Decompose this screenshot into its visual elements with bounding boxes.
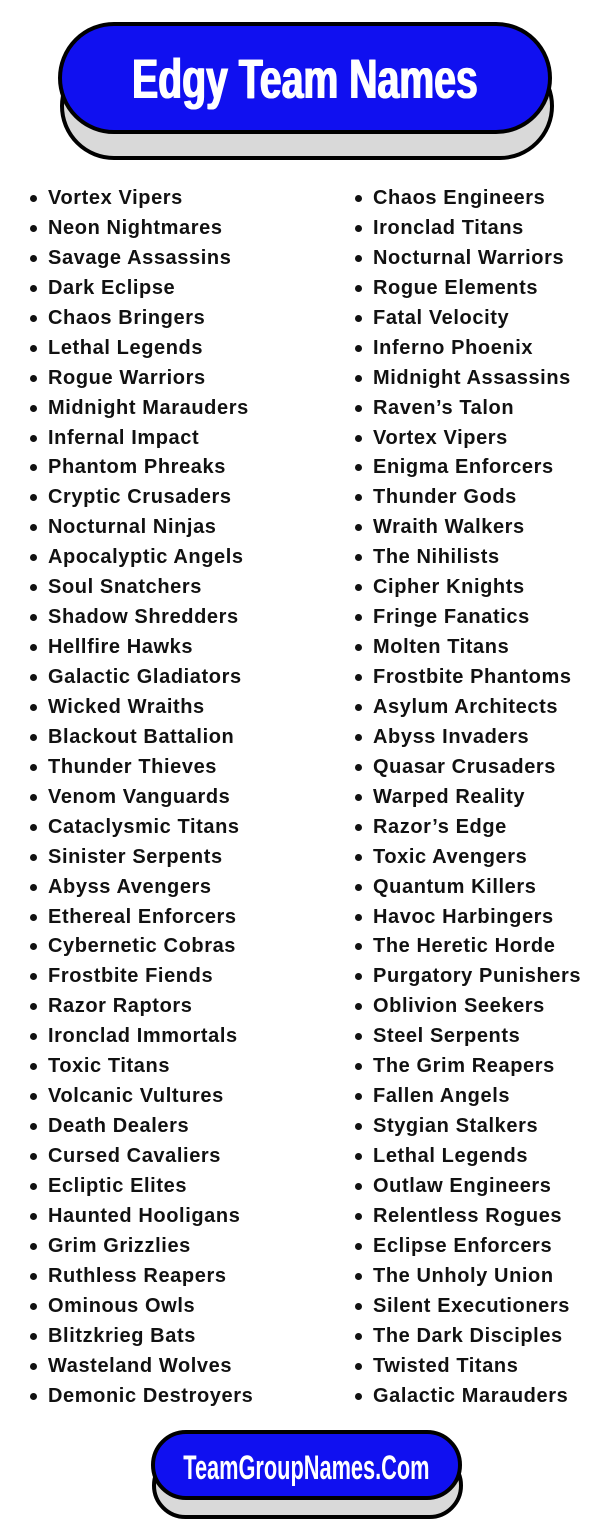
- left column list: Ominous Owls: [48, 1295, 195, 1317]
- right column list: Frostbite Phantoms: [373, 666, 572, 688]
- left column list: Cursed Cavaliers: [48, 1145, 221, 1167]
- left column list: Frostbite Fiends: [48, 965, 213, 987]
- right column list: Quantum Killers: [373, 876, 536, 898]
- right column list: Steel Serpents: [373, 1025, 520, 1047]
- left column list: Grim Grizzlies: [48, 1235, 191, 1257]
- left column list: Lethal Legends: [48, 337, 203, 359]
- right column list: Chaos Engineers: [373, 187, 545, 209]
- right column list: Enigma Enforcers: [373, 456, 554, 478]
- right column list: Stygian Stalkers: [373, 1115, 538, 1137]
- left column list: Demonic Destroyers: [48, 1384, 253, 1406]
- left column list: Wicked Wraiths: [48, 696, 205, 718]
- right column list: Wraith Walkers: [373, 516, 525, 538]
- footer text: [151, 1430, 462, 1500]
- left column list: Shadow Shredders: [48, 606, 239, 628]
- left column list: Thunder Thieves: [48, 756, 217, 778]
- left column list: Phantom Phreaks: [48, 456, 226, 478]
- right column list: Fatal Velocity: [373, 307, 509, 329]
- left column list: Venom Vanguards: [48, 786, 230, 808]
- right column list: Eclipse Enforcers: [373, 1235, 552, 1257]
- right column list: Galactic Marauders: [373, 1384, 568, 1406]
- left column list: Chaos Bringers: [48, 307, 205, 329]
- title banner: [58, 22, 554, 160]
- right column list: The Unholy Union: [373, 1265, 554, 1287]
- left column list: Cybernetic Cobras: [48, 935, 236, 957]
- right column list: Fringe Fanatics: [373, 606, 530, 628]
- right column list: Inferno Phoenix: [373, 337, 533, 359]
- right column list: Raven’s Talon: [373, 397, 514, 419]
- right column list: Relentless Rogues: [373, 1205, 562, 1227]
- right column list: Silent Executioners: [373, 1295, 570, 1317]
- left column list: Sinister Serpents: [48, 846, 223, 868]
- right column list: Molten Titans: [373, 636, 509, 658]
- left column list: Ecliptic Elites: [48, 1175, 187, 1197]
- left column list: Ethereal Enforcers: [48, 906, 237, 928]
- right column list: Havoc Harbingers: [373, 906, 554, 928]
- left column list: Neon Nightmares: [48, 217, 223, 239]
- left column list: Savage Assassins: [48, 247, 231, 269]
- left column list: Nocturnal Ninjas: [48, 516, 217, 538]
- left column list: Vortex Vipers: [48, 187, 183, 209]
- title: [58, 22, 552, 134]
- left column list: Galactic Gladiators: [48, 666, 242, 688]
- right column list: [355, 187, 581, 1406]
- left column list: Ironclad Immortals: [48, 1025, 238, 1047]
- footer banner: [151, 1430, 463, 1519]
- right column list: Nocturnal Warriors: [373, 247, 564, 269]
- left column list: Apocalyptic Angels: [48, 546, 244, 568]
- left column list: [30, 187, 253, 1406]
- left column list: Dark Eclipse: [48, 277, 175, 299]
- left column list: Haunted Hooligans: [48, 1205, 240, 1227]
- left column list: Blitzkrieg Bats: [48, 1325, 196, 1347]
- right column list: Oblivion Seekers: [373, 995, 545, 1017]
- right column list: Abyss Invaders: [373, 726, 529, 748]
- left column list: Death Dealers: [48, 1115, 189, 1137]
- left column list: Volcanic Vultures: [48, 1085, 224, 1107]
- left column list: Blackout Battalion: [48, 726, 234, 748]
- title: Edgy Team Names: [132, 46, 478, 110]
- right column list: The Dark Disciples: [373, 1325, 563, 1347]
- right column list: Ironclad Titans: [373, 217, 524, 239]
- left column list: Rogue Warriors: [48, 367, 206, 389]
- left column list: Wasteland Wolves: [48, 1355, 232, 1377]
- right column list: The Nihilists: [373, 546, 500, 568]
- right column list: Purgatory Punishers: [373, 965, 581, 987]
- right column list: Thunder Gods: [373, 486, 517, 508]
- right column list: Midnight Assassins: [373, 367, 571, 389]
- right column list: The Grim Reapers: [373, 1055, 555, 1077]
- left column list: Razor Raptors: [48, 995, 192, 1017]
- right column list: Razor’s Edge: [373, 816, 507, 838]
- left column list: Ruthless Reapers: [48, 1265, 227, 1287]
- right column list: Outlaw Engineers: [373, 1175, 552, 1197]
- left column list: Infernal Impact: [48, 426, 199, 448]
- right column list: Cipher Knights: [373, 576, 525, 598]
- right column list: Quasar Crusaders: [373, 756, 556, 778]
- right column list: Twisted Titans: [373, 1355, 518, 1377]
- left column list: Hellfire Hawks: [48, 636, 193, 658]
- left column list: Cryptic Crusaders: [48, 486, 232, 508]
- right column list: The Heretic Horde: [373, 935, 555, 957]
- right column list: Lethal Legends: [373, 1145, 528, 1167]
- left column list: Midnight Marauders: [48, 397, 249, 419]
- left column list: Cataclysmic Titans: [48, 816, 240, 838]
- footer text: TeamGroupNames.Com: [183, 1448, 430, 1486]
- right column list: Vortex Vipers: [373, 426, 508, 448]
- right column list: Toxic Avengers: [373, 846, 527, 868]
- left column list: Toxic Titans: [48, 1055, 170, 1077]
- right column list: Warped Reality: [373, 786, 525, 808]
- left column list: Soul Snatchers: [48, 576, 202, 598]
- right column list: Asylum Architects: [373, 696, 558, 718]
- left column list: Abyss Avengers: [48, 876, 212, 898]
- right column list: Fallen Angels: [373, 1085, 510, 1107]
- right column list: Rogue Elements: [373, 277, 538, 299]
